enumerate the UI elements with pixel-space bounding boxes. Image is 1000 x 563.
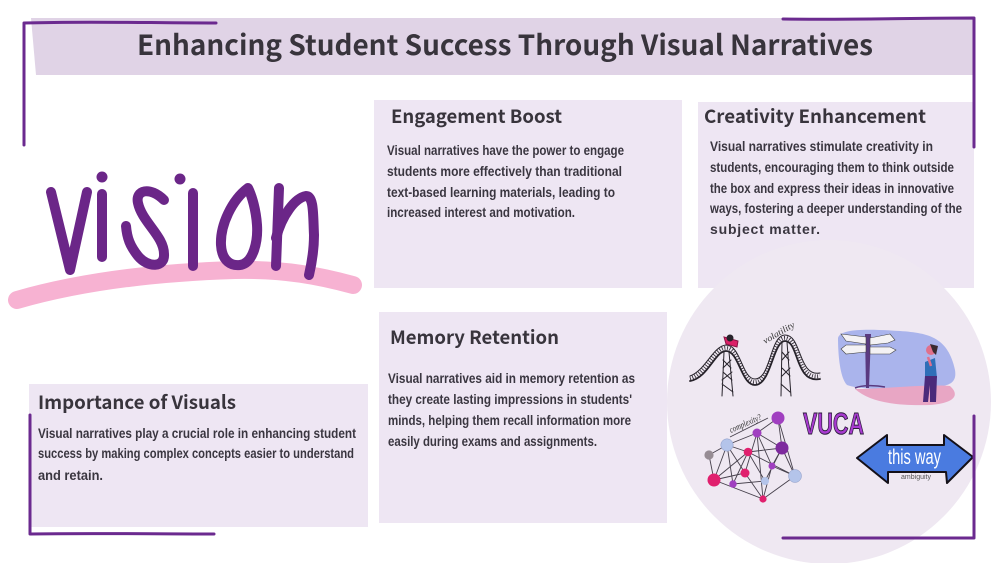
text: memory retention: minds, helping them recall information more bbox=[388, 412, 631, 428]
illustration: roller coaster bbox=[690, 320, 820, 396]
heading: importance of visuals: Importance of Visuals bbox=[38, 389, 236, 415]
text: memory retention bbox=[388, 370, 635, 449]
text: creativity enhancement: Visual narratives stimulate creativity in bbox=[710, 138, 933, 154]
text: creativity enhancement: the box and express their ideas in innovative bbox=[710, 180, 954, 196]
heading: engagement boost: Engagement Boost bbox=[391, 103, 562, 129]
panel: engagement boost bbox=[374, 100, 682, 288]
text: importance of visuals bbox=[38, 425, 356, 483]
coaster car bbox=[724, 337, 738, 347]
text: memory retention: they create lasting impressions in students' bbox=[388, 391, 632, 407]
vision lettering bbox=[0, 0, 353, 300]
arrow: this way: ambiguity bbox=[901, 474, 931, 481]
arrow: this way: this way bbox=[888, 446, 941, 469]
pink underline bbox=[17, 270, 353, 300]
text: engagement boost: increased interest and motivation. bbox=[387, 204, 575, 220]
panel: memory retention bbox=[379, 312, 667, 523]
label: complexity: complexity? bbox=[728, 412, 763, 435]
text: importance of visuals: and retain. bbox=[38, 467, 103, 483]
title: Enhancing Student Success Through Visual Narratives bbox=[137, 24, 873, 64]
text: memory retention: easily during exams and assignments. bbox=[388, 433, 597, 449]
text: creativity enhancement bbox=[709, 138, 962, 237]
word: vision bbox=[51, 188, 314, 275]
text: creativity enhancement: students, encouraging them to think outside bbox=[710, 159, 954, 175]
illustration: signpost and thinker bbox=[838, 330, 955, 405]
text: engagement boost: text-based learning materials, leading to bbox=[387, 184, 615, 200]
label: VUCA: VUCA bbox=[803, 406, 864, 441]
background circle bbox=[667, 240, 991, 563]
text: engagement boost: Visual narratives have the power to engage bbox=[387, 142, 624, 158]
text: importance of visuals: Visual narratives play a crucial role in enhancing student bbox=[38, 425, 356, 441]
thinking person bbox=[925, 358, 937, 378]
text: creativity enhancement: subject matter. bbox=[710, 221, 820, 237]
heading: memory retention: Memory Retention bbox=[390, 324, 559, 350]
text: engagement boost bbox=[387, 142, 624, 220]
heading: creativity enhancement: Creativity Enhancement bbox=[704, 103, 926, 129]
illustration: network bbox=[704, 412, 802, 503]
label: volatility: volatility bbox=[761, 320, 796, 346]
text: engagement boost: students more effectively than traditional bbox=[387, 163, 622, 179]
text: memory retention: Visual narratives aid in memory retention as bbox=[388, 370, 635, 386]
panel: creativity enhancement bbox=[698, 102, 974, 288]
text: importance of visuals: success by making complex concepts easier to understand bbox=[38, 445, 354, 461]
arrow: this way bbox=[857, 435, 973, 483]
sign arrows bbox=[841, 334, 866, 344]
title band bbox=[31, 18, 973, 75]
panel: importance of visuals bbox=[29, 384, 368, 527]
